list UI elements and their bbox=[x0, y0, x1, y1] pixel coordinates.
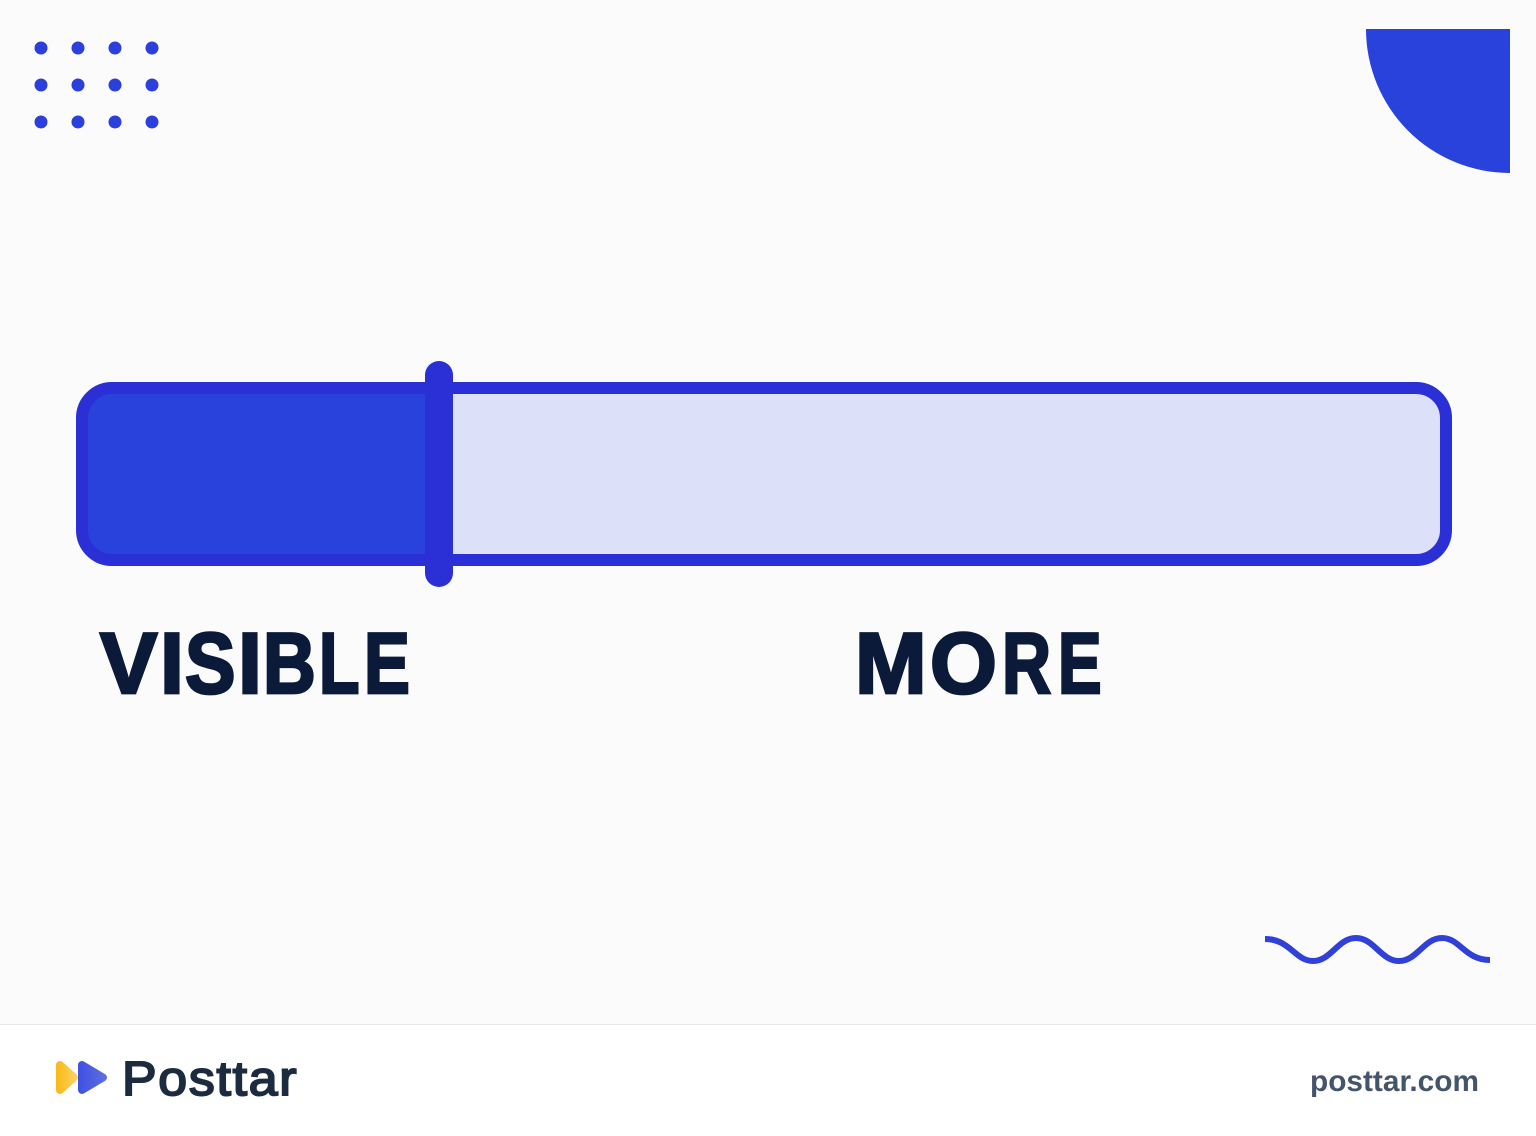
decorative dot grid bbox=[34, 42, 158, 128]
footer bbox=[0, 1024, 1536, 1136]
label: more: R bbox=[1002, 616, 1051, 712]
label: visible: I bbox=[160, 616, 184, 712]
label: more: O bbox=[930, 616, 997, 712]
label: more bbox=[855, 616, 1102, 712]
progress bar bbox=[82, 361, 1446, 587]
decorative quarter circle bbox=[1366, 29, 1510, 173]
label: visible: V bbox=[100, 616, 157, 712]
bar: unfilled track bbox=[82, 388, 1446, 560]
label: visible: E bbox=[364, 616, 410, 712]
label: visible: I bbox=[238, 616, 262, 712]
bar: divider handle bbox=[425, 361, 453, 587]
bar: visible filled section bbox=[82, 388, 439, 560]
label: visible: L bbox=[319, 616, 359, 712]
label: more: E bbox=[1058, 616, 1102, 712]
label: visible bbox=[98, 616, 410, 712]
website url: posttar.com bbox=[1310, 1065, 1479, 1098]
label: more: M bbox=[855, 616, 927, 712]
footer background bbox=[0, 1024, 1536, 1136]
decorative wave bbox=[1265, 938, 1490, 961]
label: visible: S bbox=[185, 616, 235, 712]
label: visible: B bbox=[263, 616, 315, 712]
brand name: Posttar bbox=[122, 1052, 298, 1106]
icon: posttar logo bbox=[60, 1065, 103, 1090]
bar: outline bbox=[82, 388, 1446, 560]
